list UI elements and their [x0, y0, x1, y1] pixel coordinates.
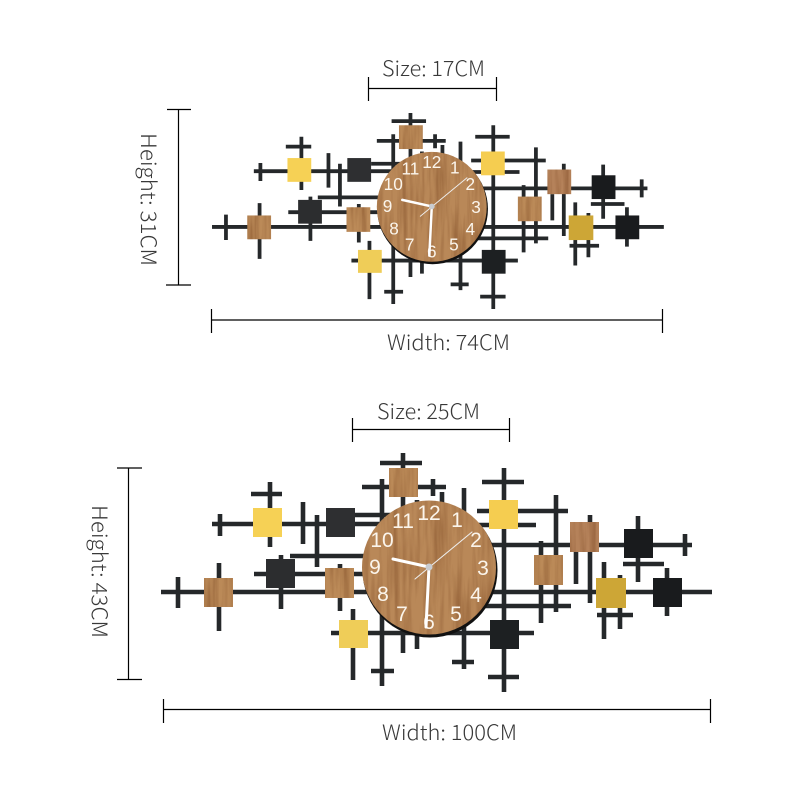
clock numerals: 3 [477, 557, 489, 580]
label: small height: Height: 31CM [134, 133, 164, 266]
dimension: large clock height line [117, 468, 142, 680]
clock numerals: 3 [471, 197, 481, 217]
clock numerals: 12 [417, 502, 441, 525]
clock numerals: 4 [466, 219, 476, 239]
clock numerals: 8 [377, 583, 389, 606]
clock numerals: 1 [450, 158, 460, 178]
large clock: 25cm model [161, 453, 712, 692]
clock numerals: 9 [369, 556, 381, 579]
clock numerals: 8 [389, 218, 399, 238]
clock hands [393, 532, 472, 627]
clock shadow [377, 154, 488, 264]
decorative squares [204, 468, 682, 649]
dimension: small clock size line [368, 77, 496, 101]
label: small size: Size: 17CM [382, 53, 485, 83]
label: large size: Size: 25CM [377, 396, 480, 426]
clock face [362, 500, 496, 634]
clock shadow [362, 502, 498, 638]
clock numerals: 11 [402, 158, 419, 178]
label: large width: Width: 100CM [382, 717, 517, 747]
clock numerals: 1 [451, 509, 463, 532]
label: small width: Width: 74CM [387, 327, 510, 357]
clock numerals [369, 502, 489, 634]
clock numerals: 2 [470, 529, 482, 552]
decorative squares [247, 125, 639, 274]
dimension: large clock size line [352, 418, 510, 442]
clock numerals: 9 [383, 196, 392, 216]
metal frame bars [161, 453, 712, 692]
clock numerals: 2 [466, 174, 475, 194]
small clock: 17cm model [212, 113, 664, 309]
clock numerals: 7 [405, 235, 414, 255]
clock hands [402, 178, 467, 256]
clock numerals: 6 [423, 611, 435, 634]
metal frame bars [212, 113, 664, 309]
label: large height: Height: 43CM [85, 505, 115, 638]
clock numerals: 12 [422, 152, 441, 172]
dimension: small clock height line [166, 110, 191, 285]
dimension: small clock width line [212, 309, 662, 333]
clock numerals: 7 [396, 603, 408, 626]
clock numerals: 10 [384, 174, 403, 194]
clock face [377, 152, 487, 262]
clock numerals: 5 [450, 603, 462, 626]
clock numerals: 10 [370, 529, 394, 552]
clock numerals: 11 [392, 510, 414, 533]
clock numerals: 6 [427, 241, 437, 261]
clock numerals [383, 152, 481, 261]
clock numerals: 4 [470, 584, 482, 607]
dimension: large clock width line [164, 699, 710, 723]
clock numerals: 5 [449, 235, 459, 255]
